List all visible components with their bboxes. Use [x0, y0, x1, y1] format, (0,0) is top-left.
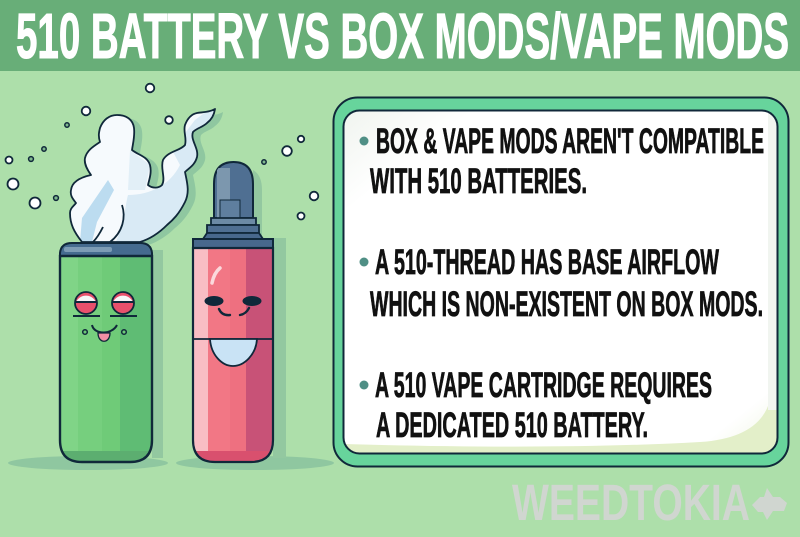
bullet 1	[360, 122, 764, 201]
bullet 3	[360, 366, 712, 445]
battery cast shadow	[152, 250, 163, 458]
panel: key points	[334, 98, 788, 466]
ground shadows	[8, 456, 334, 470]
icon: green 510 battery	[60, 243, 163, 462]
bullet 1: WITH 510 BATTERIES.	[370, 162, 587, 201]
face: red vape mod	[193, 296, 273, 366]
icon: smoke cloud	[69, 108, 223, 244]
sparkle dots	[6, 84, 318, 220]
icon: watermark leaf	[752, 488, 787, 520]
bullet 2	[360, 243, 763, 324]
device cast shadow	[253, 170, 286, 458]
icon: red vape mod	[193, 162, 286, 462]
face: green battery	[73, 292, 137, 341]
dome nozzle	[214, 162, 253, 218]
